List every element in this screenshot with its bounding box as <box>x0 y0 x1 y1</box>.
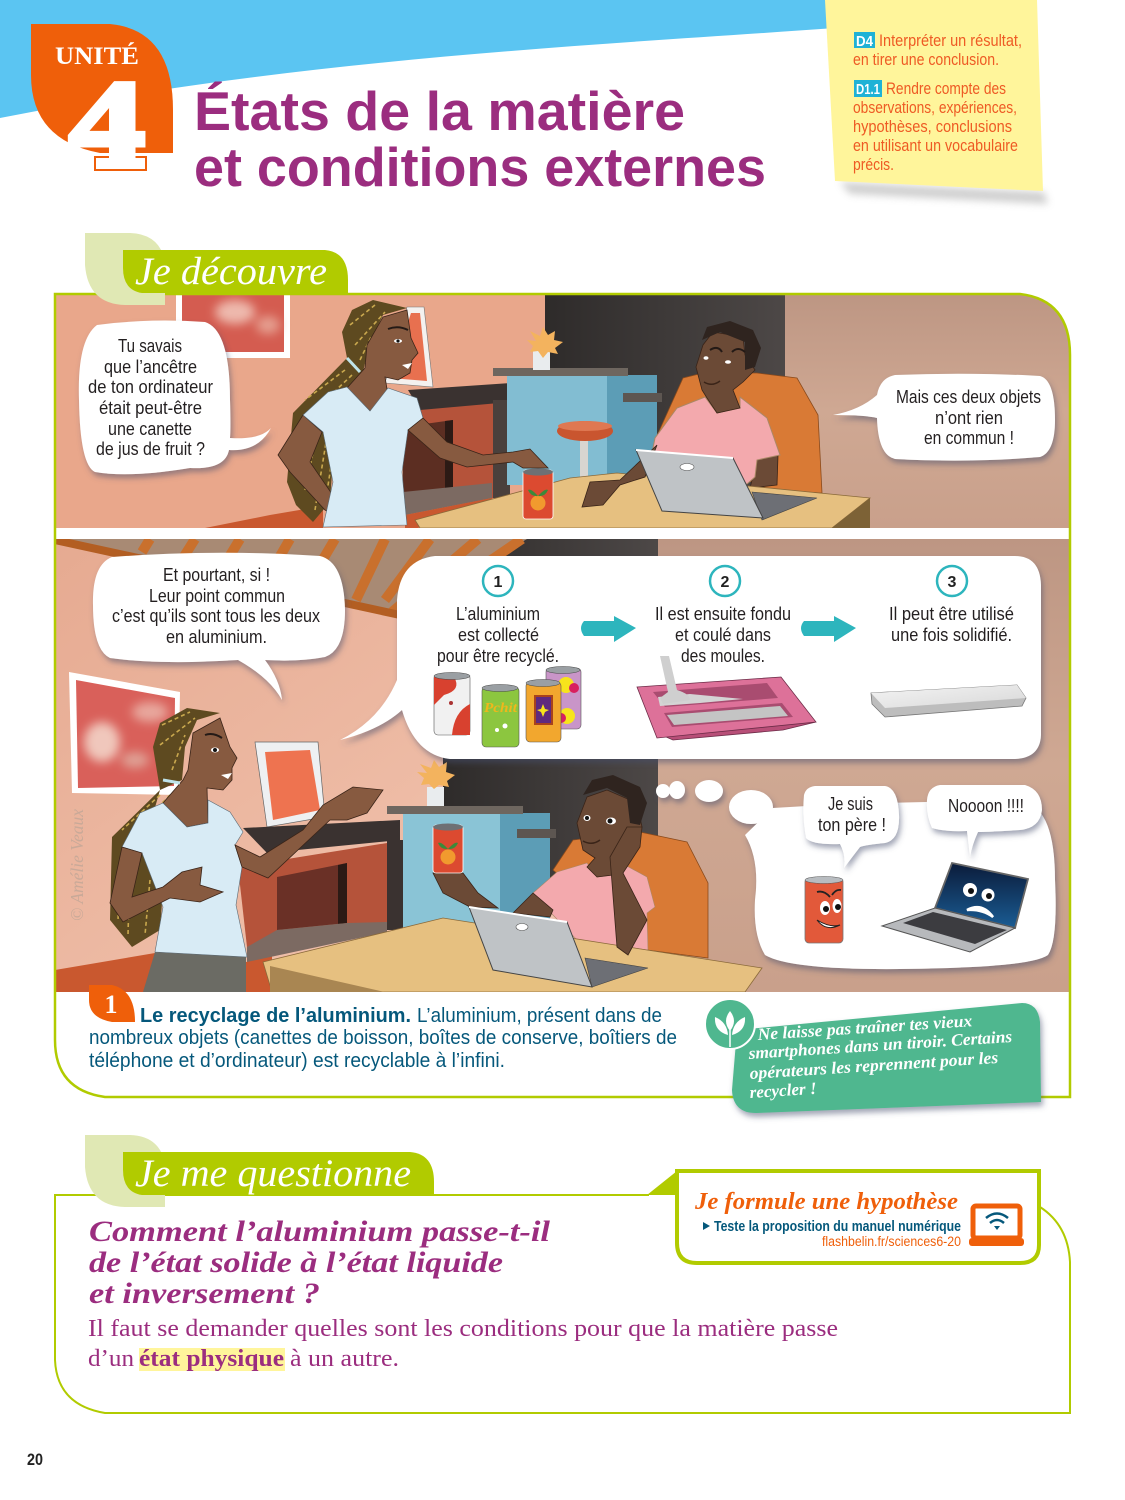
hypothesis box: Teste la proposition du manuel numérique <box>714 1218 961 1235</box>
speech bubble: Je suis ton père: Je suis <box>828 794 873 814</box>
heading: Je me questionne <box>85 1135 434 1207</box>
girl <box>110 708 383 992</box>
step 2 <box>655 566 791 666</box>
speech bubble: Mais ces deux objets: Mais ces deux objets <box>896 387 1041 407</box>
cans: Pchit <box>484 701 518 716</box>
question <box>89 1215 551 1310</box>
speech bubble: Nooon <box>927 785 1042 857</box>
title <box>194 80 766 198</box>
sticky note: competences: hypothèses, conclusions <box>853 117 1012 136</box>
unit badge <box>31 24 173 186</box>
body text: à un autre. <box>290 1346 399 1372</box>
eco tip note <box>705 999 1041 1113</box>
blue cabinet <box>493 368 662 485</box>
unit badge: UNITÉ <box>55 42 139 70</box>
frame on wall <box>255 742 325 827</box>
sticky note: competences: D1.1 <box>856 81 880 98</box>
chair <box>553 832 708 958</box>
speech bubble: Tu savais: une canette <box>108 419 192 439</box>
vase and flower <box>527 327 563 370</box>
cans <box>434 666 581 747</box>
panel: first comic strip <box>55 294 1070 528</box>
panel: second comic strip <box>55 539 1070 992</box>
figure number badge: 1 <box>104 990 118 1019</box>
question: et inversement ? <box>89 1277 320 1310</box>
vase and flower <box>417 760 455 806</box>
arrow <box>801 616 856 642</box>
caption <box>89 1004 677 1072</box>
frame: Je découvre <box>55 294 1070 1097</box>
fireplace <box>403 383 510 528</box>
caption: L’aluminium, présent dans de <box>417 1004 662 1027</box>
sticky note: competences: Interpréter un résultat, <box>879 31 1022 50</box>
signature: © Amélie Veaux <box>67 809 87 921</box>
eco tip note: smartphones dans un tiroir. Certains <box>747 1027 1013 1063</box>
step 1 <box>437 566 559 666</box>
speech bubble: Tu savais: Tu savais <box>118 336 182 356</box>
boy <box>650 321 780 488</box>
question: de l’état solide à l’état liquide <box>89 1246 503 1279</box>
small frame <box>385 307 433 387</box>
step 1: pour être recyclé. <box>437 646 559 666</box>
table <box>263 918 762 992</box>
speech bubble: Tu savais: était peut-être <box>99 398 202 418</box>
sticky note: competences: observations, expériences, <box>853 98 1017 117</box>
step 1: L’aluminium <box>456 604 540 624</box>
speech bubble: Et pourtant: Et pourtant, si ! <box>163 565 270 585</box>
panel: aluminium recycling steps <box>340 556 1041 759</box>
icon: leaves <box>705 999 755 1049</box>
sticky note: competences <box>825 0 1048 204</box>
icon: laptop with wifi <box>969 1206 1024 1246</box>
speech bubble: Tu savais: de jus de fruit ? <box>96 439 205 459</box>
speech bubble: Je suis ton père: ton père ! <box>818 815 886 835</box>
stool <box>557 421 613 478</box>
heading: Je découvre <box>85 233 348 305</box>
caption: Le recyclage de l’aluminium. <box>140 1004 411 1027</box>
boy <box>433 775 655 950</box>
sticky note: competences: D4 <box>856 33 874 50</box>
page number: 20 <box>27 1450 43 1469</box>
body text: état physique <box>139 1346 284 1372</box>
blue header swoosh <box>0 0 835 118</box>
laptop <box>636 450 817 520</box>
arrow <box>581 616 636 642</box>
sticky note: competences: Rendre compte des <box>886 79 1006 98</box>
frame: Je me questionne <box>55 1195 1070 1413</box>
speech bubble: Mais ces deux objets <box>833 374 1055 461</box>
speech bubble: Mais ces deux objets: n’ont rien <box>935 408 1003 428</box>
step 3: une fois solidifié. <box>891 625 1012 645</box>
hypothesis box: Je formule une hypothèse <box>694 1189 958 1215</box>
title: et conditions externes <box>194 136 766 198</box>
hypothesis box <box>647 1171 1039 1263</box>
speech bubble: Et pourtant: c’est qu’ils sont tous les deux <box>112 606 320 626</box>
sticky note: competences: précis. <box>853 155 894 174</box>
speech bubble: Tu savais <box>79 321 271 474</box>
step 3: 3 <box>948 574 957 591</box>
step 2: Il est ensuite fondu <box>655 604 791 624</box>
painting <box>176 294 290 358</box>
title: États de la matière <box>194 80 685 142</box>
boy propping arm <box>610 827 647 955</box>
painting left <box>69 672 180 795</box>
mould <box>637 656 816 740</box>
speech bubble: Tu savais: que l’ancêtre <box>104 357 197 377</box>
speech bubble: Tu savais: de ton ordinateur <box>88 377 213 397</box>
step 1: 1 <box>494 574 503 591</box>
eco tip note: Ne laisse pas traîner tes vieux <box>756 1011 973 1044</box>
body text: Il faut se demander quelles sont les conditions pour que la matière passe <box>88 1316 838 1342</box>
blue cabinet <box>387 806 556 927</box>
table <box>415 473 870 528</box>
step 2: 2 <box>721 574 730 591</box>
sticky note: competences: en tirer une conclusion. <box>853 50 999 69</box>
step 2: des moules. <box>681 646 765 666</box>
step 2: et coulé dans <box>675 625 771 645</box>
sticky note: competences: en utilisant un vocabulaire <box>853 136 1018 155</box>
thought cloud <box>656 780 1056 969</box>
heading: Je découvre: Je découvre <box>135 250 327 293</box>
fireplace <box>238 820 403 962</box>
figure number badge <box>89 985 135 1022</box>
floating can <box>433 824 463 873</box>
girl <box>278 300 548 527</box>
body text: d’un <box>88 1346 134 1372</box>
ingot <box>871 685 1026 717</box>
speech bubble: Et pourtant: Leur point commun <box>149 586 285 606</box>
laptop <box>469 907 648 987</box>
heading: Je me questionne: Je me questionne <box>135 1152 411 1195</box>
speech bubble: Nooon: Noooon !!!! <box>948 796 1024 816</box>
caption: nombreux objets (canettes de boisson, boîtes de conserve, boîtiers de <box>89 1026 677 1049</box>
speech bubble: Et pourtant: en aluminium. <box>166 627 267 647</box>
speech bubble: Mais ces deux objets: en commun ! <box>924 428 1014 448</box>
eco tip note: recycler ! <box>749 1079 817 1102</box>
juice can <box>523 468 553 519</box>
boy arm on table <box>582 445 657 507</box>
ceiling beams <box>55 539 527 618</box>
caption: téléphone et d’ordinateur) est recyclable à l’infini. <box>89 1049 505 1072</box>
body text <box>88 1316 838 1372</box>
speech bubble: Je suis ton père <box>803 786 899 868</box>
eco tip note: opérateurs les reprennent pour les <box>749 1048 999 1083</box>
speech bubble: Et pourtant <box>93 553 345 700</box>
hypothesis box: flashbelin.fr/sciences6-20 <box>822 1234 961 1249</box>
step 3: Il peut être utilisé <box>889 604 1014 624</box>
chair <box>655 373 822 493</box>
can character <box>805 876 843 943</box>
step 3 <box>889 566 1014 645</box>
unit badge: 4 <box>69 58 145 186</box>
floor <box>55 953 272 992</box>
step 1: est collecté <box>458 625 539 645</box>
laptop character <box>882 863 1028 952</box>
question: Comment l’aluminium passe-t-il <box>89 1215 551 1248</box>
